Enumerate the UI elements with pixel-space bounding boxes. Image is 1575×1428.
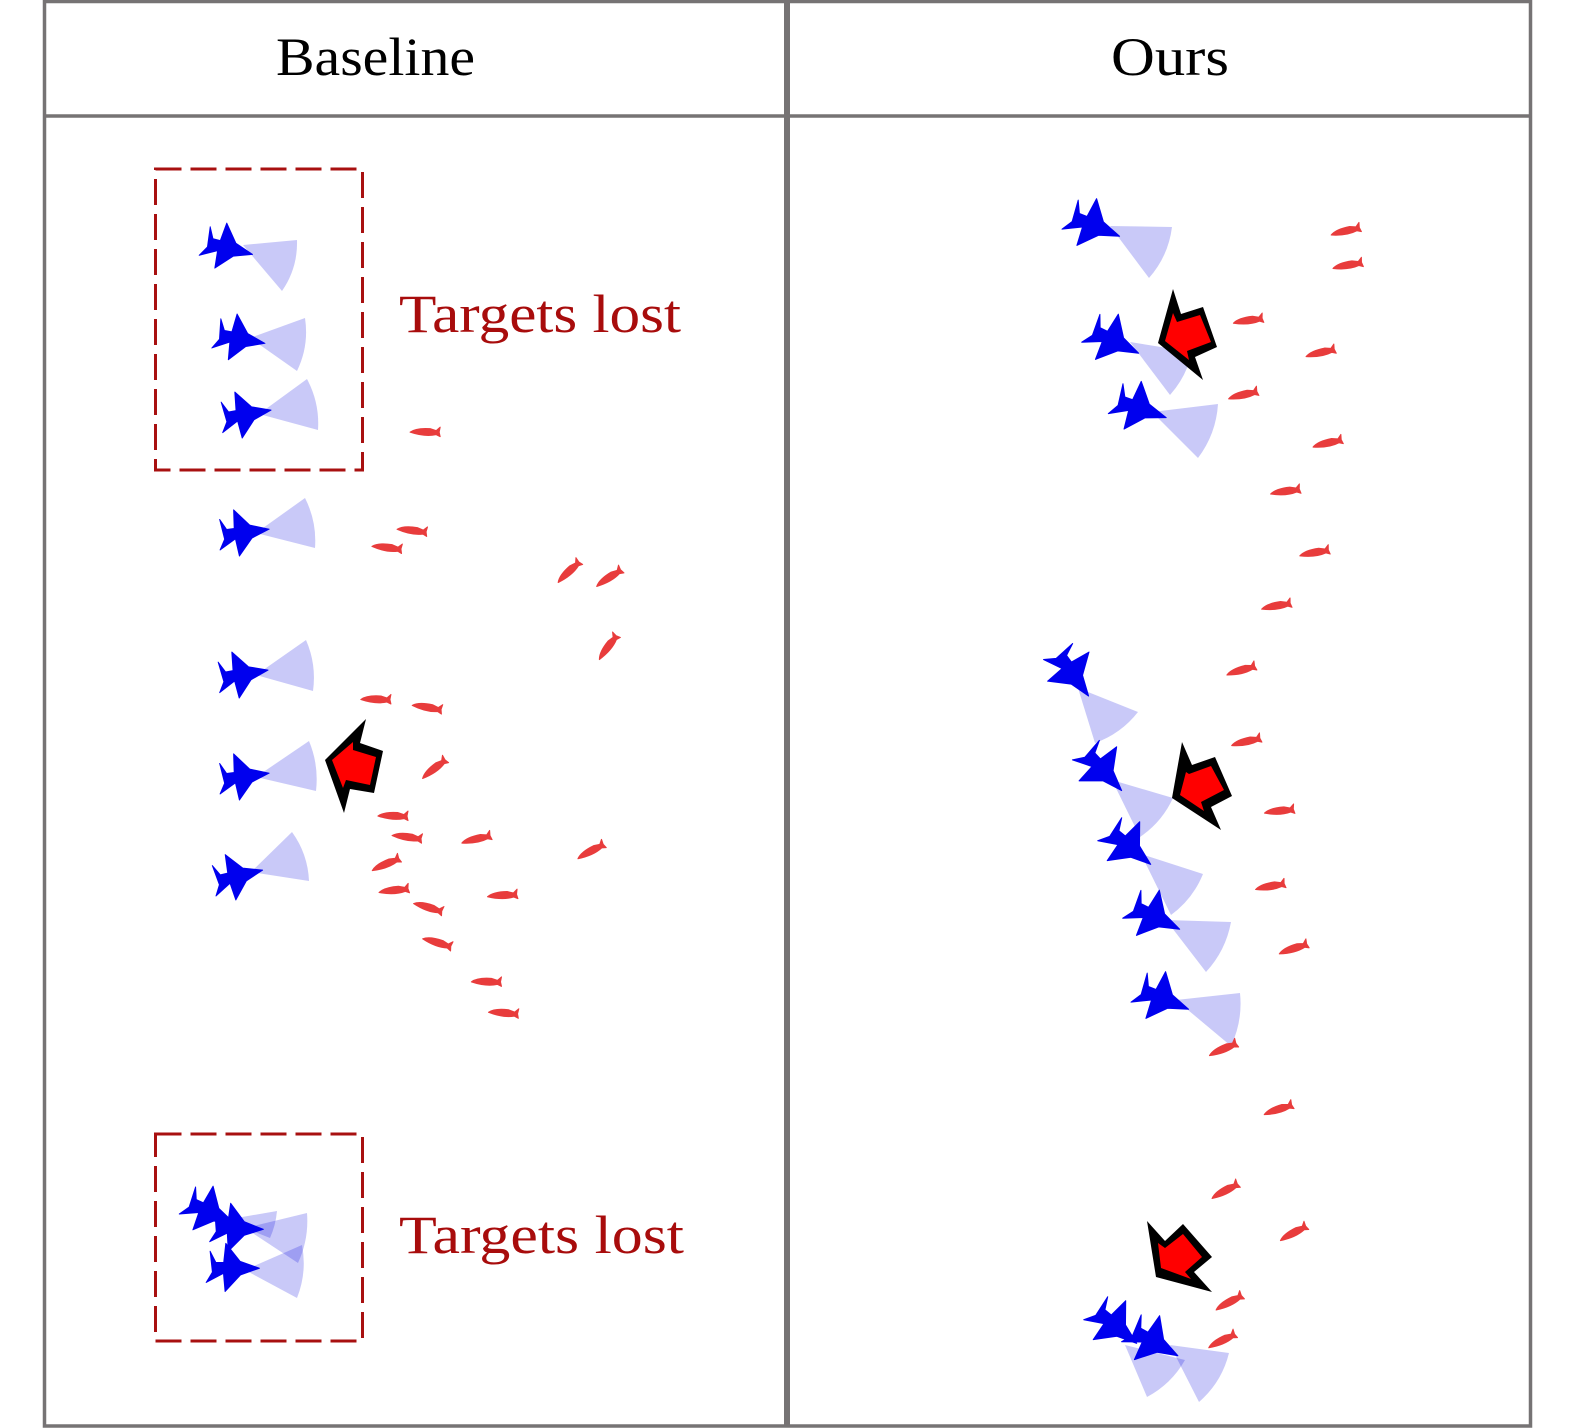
arrow: ours top [1158, 289, 1217, 380]
label: targets lost top: Targets lost [399, 284, 681, 344]
panel: baseline [156, 169, 684, 1341]
panel: ours [1035, 194, 1363, 1402]
arrow: ours middle [1172, 742, 1232, 830]
aircraft: baseline formation [177, 223, 277, 1295]
arrow: baseline [325, 719, 383, 813]
targets: baseline fish [361, 427, 624, 1018]
aircraft: ours formation [1035, 194, 1193, 1370]
sensor cones: ours formation [1078, 226, 1241, 1402]
dashed box: top lost group [156, 169, 362, 470]
heading: Ours: Ours [1111, 27, 1229, 87]
sensor cones: baseline formation [225, 240, 318, 1298]
label: targets lost bottom: Targets lost [399, 1205, 684, 1265]
heading: Baseline: Baseline [276, 27, 475, 87]
arrow: ours bottom [1147, 1221, 1212, 1292]
targets: ours fish [1206, 222, 1363, 1352]
dashed box: bottom lost group [156, 1134, 362, 1341]
